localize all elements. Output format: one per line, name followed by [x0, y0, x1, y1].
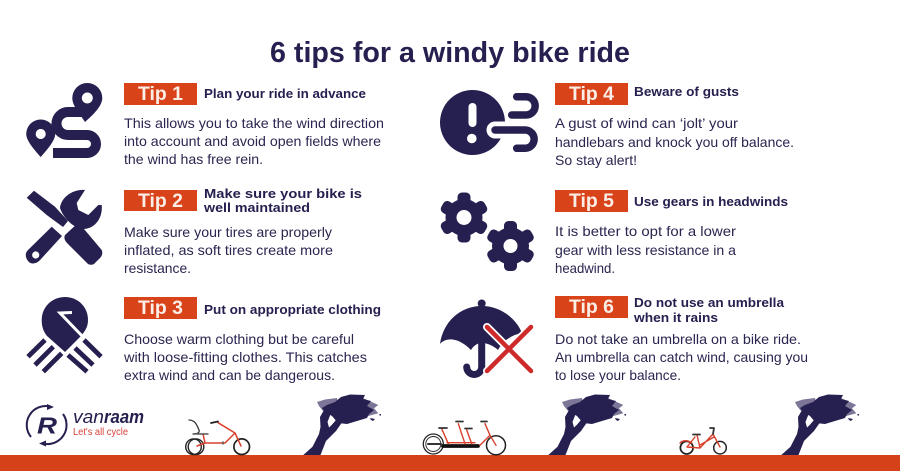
tip 6 heading: Do not use an umbrella	[634, 295, 785, 310]
tip 3 body	[123, 331, 367, 383]
tip 2 heading	[203, 186, 362, 215]
tip 4 body: So stay alert!	[555, 152, 637, 168]
tip 2 body: inflated, as soft tires create more	[124, 242, 333, 258]
tip 1 body: This allows you to take the wind direction	[124, 115, 384, 131]
tip 3 badge: Tip 3	[138, 298, 183, 319]
tip 6 body	[555, 331, 808, 383]
tip 2 body: resistance.	[124, 260, 191, 276]
tip 5 body: headwind.	[555, 260, 615, 276]
tip 1 body: into account and avoid open fields where	[124, 133, 381, 149]
tip 2 heading: Make sure your bike is	[204, 186, 362, 201]
tip 6 body: An umbrella can catch wind, causing you	[555, 349, 808, 365]
tip 4 body: handlebars and knock you off balance.	[555, 134, 794, 150]
tip 5 body: gear with less resistance in a	[555, 242, 736, 258]
panel: tip 1	[26, 83, 384, 167]
tip 5 badge: Tip 5	[569, 191, 614, 212]
ground strip	[0, 455, 900, 471]
tip 5 body	[555, 223, 736, 276]
tip 2 body: Make sure your tires are properly	[124, 224, 332, 240]
tip 3 heading: Put on appropriate clothing	[204, 302, 381, 317]
tip 1 heading: Plan your ride in advance	[204, 86, 366, 101]
panel: tip 6	[440, 295, 808, 383]
tip 4 heading: Beware of gusts	[634, 84, 739, 99]
icon: route map	[26, 83, 102, 157]
tip 6 badge: Tip 6	[569, 297, 614, 318]
tip 3 body: Choose warm clothing but be careful	[124, 331, 354, 347]
tip 4 badge: Tip 4	[569, 84, 614, 105]
tree 2	[548, 394, 626, 455]
tip 3 body: extra wind and can be dangerous.	[124, 367, 335, 383]
bike: small bike	[680, 428, 726, 454]
bike: trike	[186, 420, 250, 455]
tip 1 badge: Tip 1	[138, 84, 183, 105]
tip 6 body: Do not take an umbrella on a bike ride.	[555, 331, 801, 347]
tip 6 badge	[555, 296, 628, 318]
tip 5 body: It is better to opt for a lower	[555, 223, 736, 239]
tip 5 badge	[555, 190, 628, 212]
tip 6 heading	[633, 295, 785, 325]
tip 4 body	[555, 115, 794, 168]
tip 2 body	[124, 224, 333, 276]
panel: tip 4	[440, 83, 794, 168]
tree 3	[781, 394, 859, 455]
tip 1 body	[124, 115, 384, 167]
tip 3 body: with loose-fitting clothes. This catches	[123, 349, 367, 365]
tip 1 badge	[124, 83, 197, 105]
tip 6 heading: when it rains	[633, 310, 718, 325]
tip 1 body: the wind has free rein.	[124, 151, 263, 167]
tree 1	[303, 394, 381, 455]
panel: tip 3	[28, 297, 381, 383]
panel: tip 5	[439, 190, 788, 276]
logo: van Raam: raam	[104, 407, 144, 427]
icon: wrench and screwdriver	[26, 190, 102, 265]
logo: van Raam: R	[37, 412, 57, 438]
tip 4 badge	[555, 83, 628, 105]
logo: van Raam	[27, 404, 144, 446]
icon: scarf	[28, 297, 101, 372]
tip 4 body: A gust of wind can ‘jolt’ your	[555, 115, 738, 131]
icon: gears	[439, 192, 535, 271]
tip 6 body: to lose your balance.	[555, 367, 681, 383]
tip 2 badge	[124, 190, 197, 212]
logo: van Raam: van	[73, 407, 104, 427]
logo: van Raam: Let's all cycle	[73, 426, 128, 438]
panel: tip 2	[26, 186, 362, 276]
tip 2 badge: Tip 2	[138, 191, 183, 212]
icon: gust warning	[440, 90, 535, 155]
bike: tandem	[423, 422, 506, 455]
tip 3 badge	[124, 297, 197, 319]
tip 5 heading: Use gears in headwinds	[634, 194, 788, 209]
title: 6 tips for a windy bike ride	[270, 37, 630, 69]
tip 2 heading: well maintained	[203, 200, 310, 215]
icon: crossed-out umbrella	[440, 300, 531, 374]
